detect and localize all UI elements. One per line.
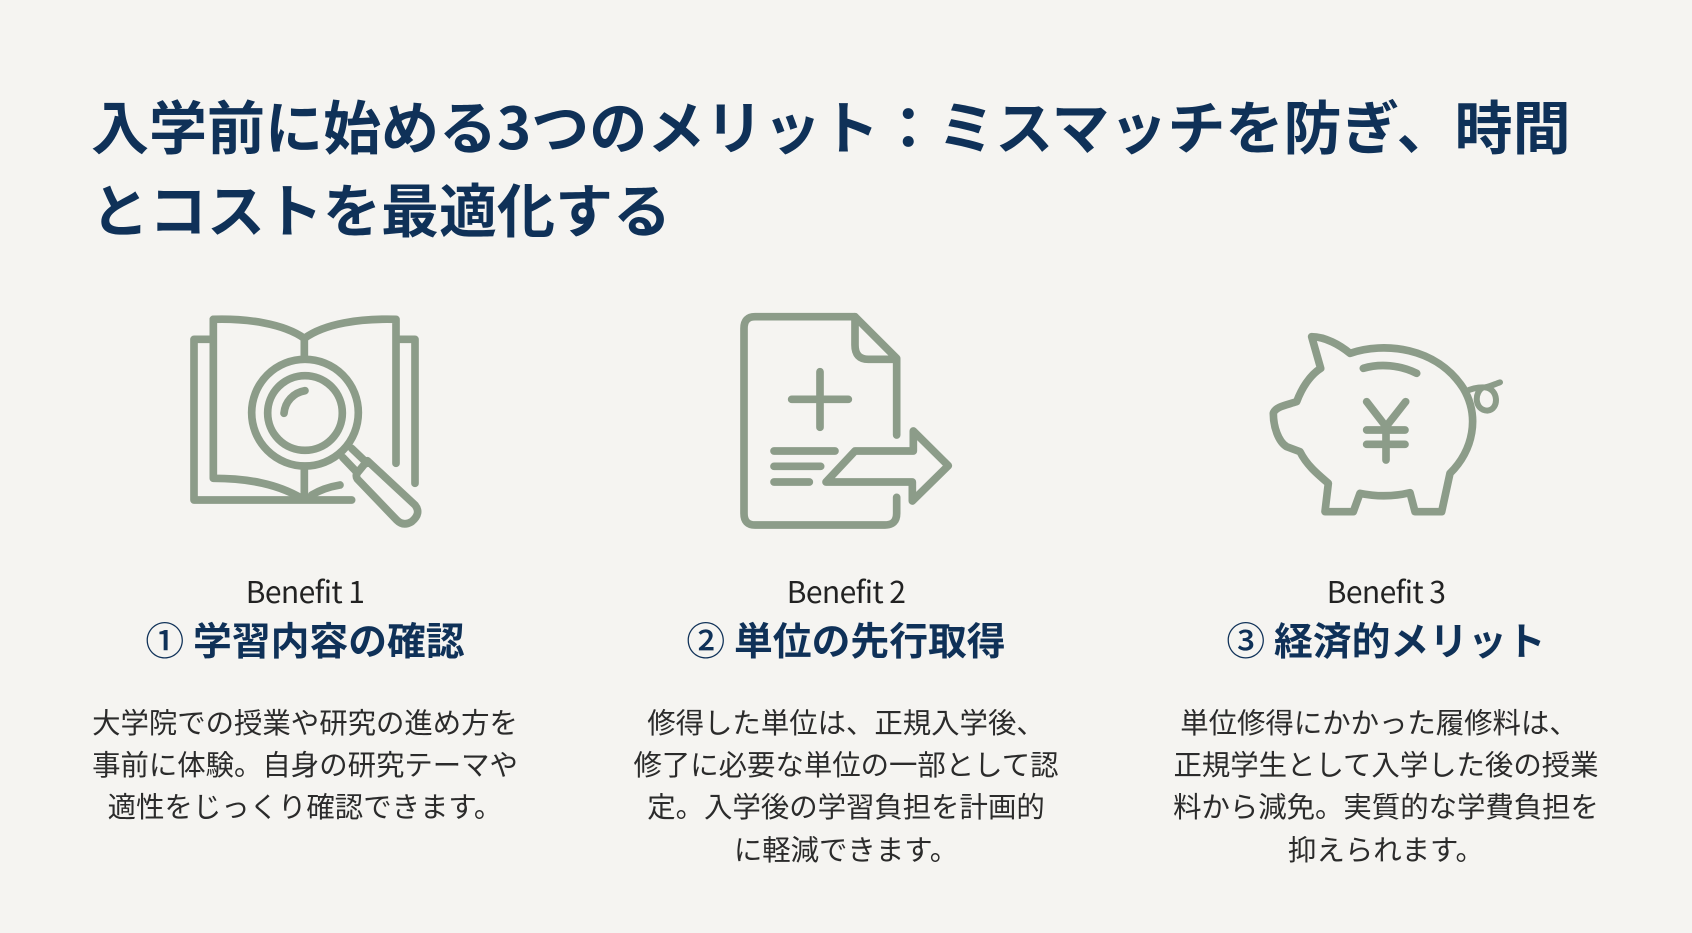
panel: benefit 3 — [1173, 568, 1599, 869]
benefit 3 heading: ③ 経済的メリット — [1226, 611, 1546, 667]
benefit 3 description: 正規学生として入学した後の授業 — [1173, 743, 1598, 784]
benefit 2 description: 修得した単位は、正規入学後、 — [647, 701, 1045, 742]
benefit 3 description: 単位修得にかかった履修料は、 — [1180, 701, 1578, 742]
benefit 3 description: 料から減免。実質的な学費負担を — [1173, 785, 1599, 826]
icon: open book with magnifying glass — [190, 315, 422, 528]
benefit 2 description: に軽減できます。 — [734, 828, 958, 869]
benefit 2 description — [633, 701, 1058, 869]
icon: document with plus and arrow — [740, 312, 952, 529]
benefit 1 description: 事前に体験。自身の研究テーマや — [92, 743, 518, 784]
panel: benefit 2 — [633, 568, 1058, 869]
icon: piggy bank with yen — [1270, 332, 1503, 516]
panel: benefit 1 — [92, 568, 518, 826]
title — [91, 82, 1571, 249]
benefit 2 heading: ② 単位の先行取得 — [686, 611, 1006, 667]
benefit 1 label: Benefit 1 — [246, 568, 364, 612]
benefit 2 label: Benefit 2 — [787, 568, 905, 612]
title: 入学前に始める3つのメリット：ミスマッチを防ぎ、時間 — [91, 82, 1571, 166]
benefit 3 label: Benefit 3 — [1327, 568, 1445, 612]
title: とコストを最適化する — [91, 165, 671, 249]
benefit 2 description: 修了に必要な単位の一部として認 — [633, 743, 1058, 784]
benefit 1 description — [92, 701, 518, 826]
benefit 1 description: 大学院での授業や研究の進め方を — [92, 701, 518, 742]
benefit 3 description: 抑えられます。 — [1288, 828, 1484, 869]
benefit 2 description: 定。入学後の学習負担を計画的 — [647, 785, 1045, 826]
benefit 3 description — [1173, 701, 1599, 869]
benefit 1 description: 適性をじっくり確認できます。 — [108, 785, 502, 826]
benefit 1 heading: ① 学習内容の確認 — [145, 611, 465, 667]
